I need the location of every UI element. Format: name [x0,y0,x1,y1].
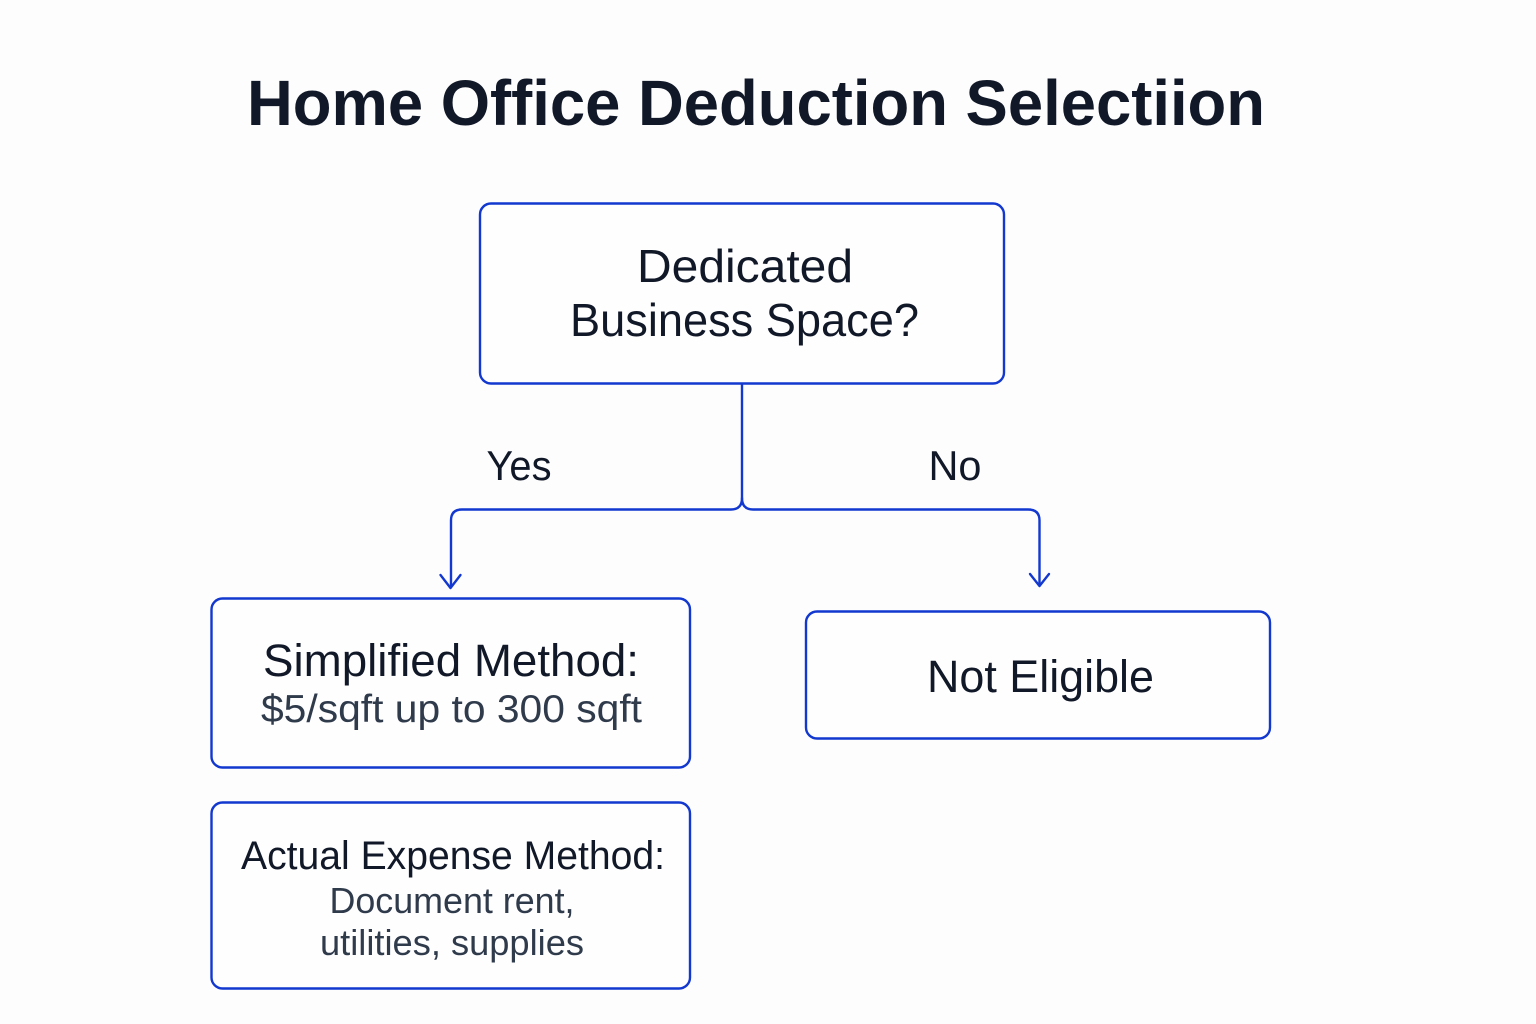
connector: no branch arrow [742,498,1049,586]
box: not eligible: Not Eligible [927,651,1154,702]
box: actual expense method: utilities, supplies [320,922,584,963]
box: simplified method: $5/sqft up to 300 sqft [261,688,642,731]
label: no: No [928,442,982,489]
box: not eligible [806,612,1270,738]
label: yes: Yes [486,442,552,489]
box: simplified method [212,598,690,768]
box: actual expense method: Document rent, [330,880,574,921]
box: actual expense method [212,802,690,988]
decision box: dedicated business space [480,204,1004,384]
box: simplified method: Simplified Method: [263,635,639,686]
decision box: dedicated business space: Dedicated [637,240,853,292]
box: actual expense method: Actual Expense Method: [241,834,665,878]
connector: yes branch arrow [440,384,742,588]
title: Home Office Deduction Selectiion [247,67,1265,139]
decision box: dedicated business space: Business Space? [570,294,919,346]
